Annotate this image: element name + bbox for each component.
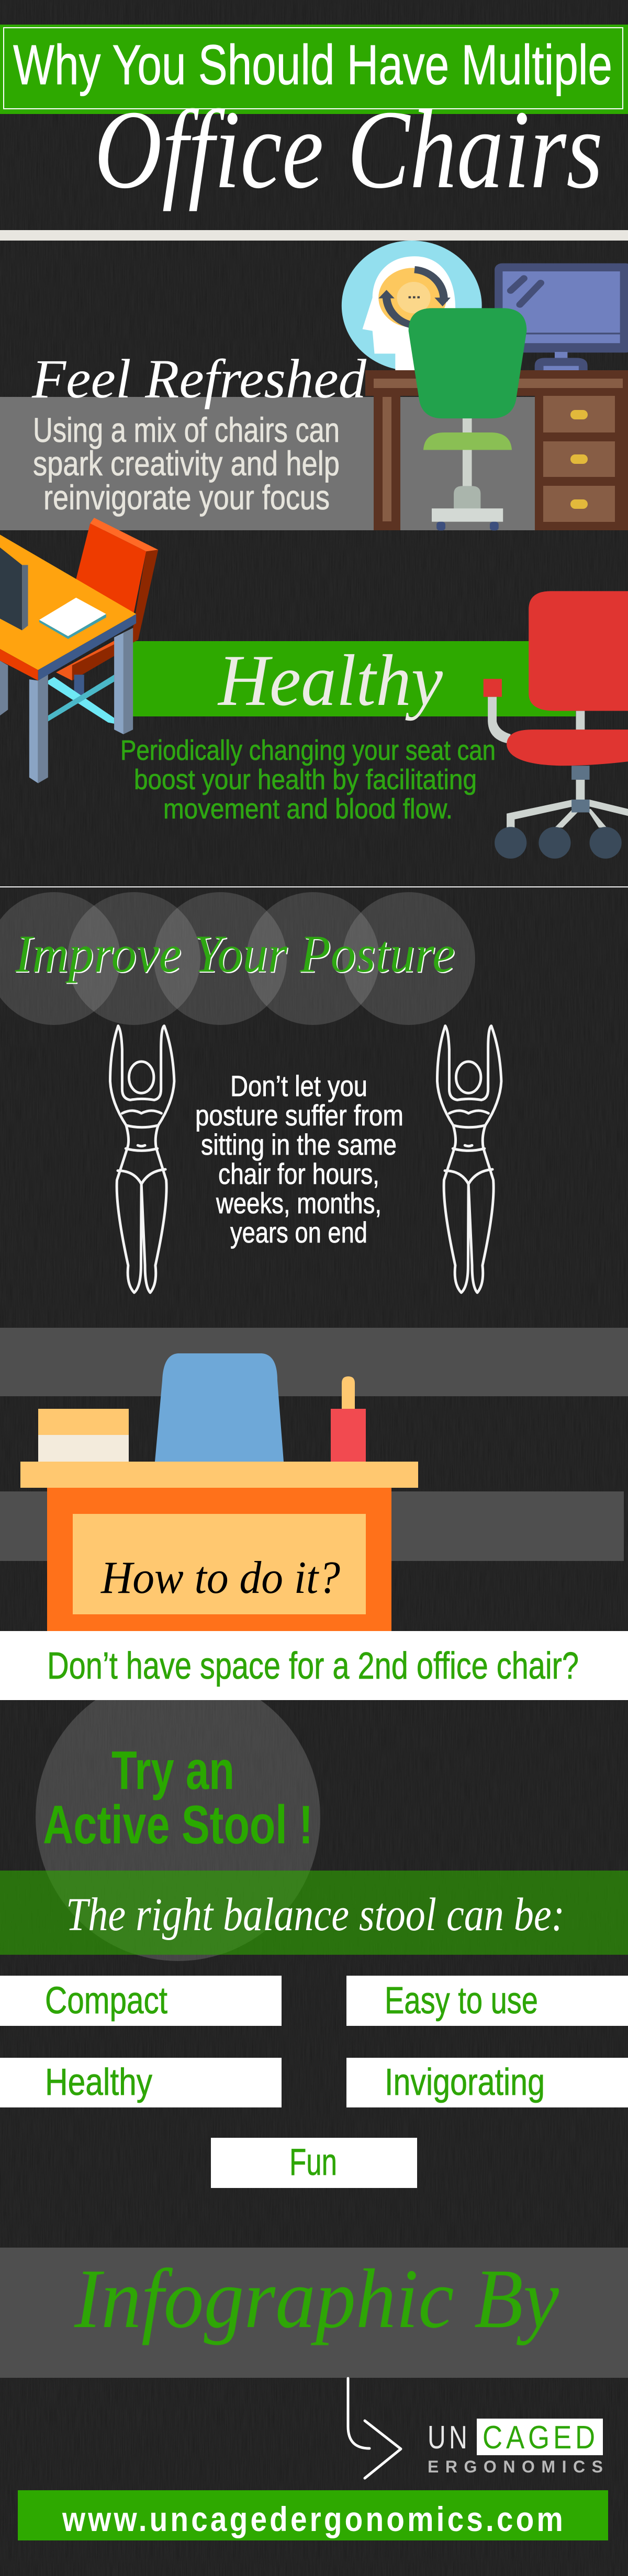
text: healthy body: Periodically changing your seat can: [120, 735, 496, 766]
panel: how to do it: [0, 1328, 628, 1631]
panel: feel refreshed: [0, 241, 628, 530]
icon: left body outline: [110, 1026, 174, 1293]
icon: head with rotating thought: [342, 241, 482, 371]
website bar: [18, 2490, 608, 2540]
box: healthy: Healthy: [45, 2061, 152, 2103]
green translucent band: [0, 1871, 628, 1955]
logo: uncaged ergonomics: ERGONOMICS: [428, 2457, 603, 2476]
heading: try an active stool: Try an: [111, 1740, 234, 1801]
green heading band: [131, 641, 576, 716]
text: posture body: chair for hours,: [218, 1157, 379, 1190]
icon: red office chair: [484, 591, 628, 859]
grey text band: [0, 397, 628, 530]
heading: healthy: Healthy: [217, 640, 443, 721]
heading shadow: improve your posture: Improve Your Posture: [16, 926, 456, 985]
box: fun: [211, 2138, 417, 2188]
text: healthy body: [120, 735, 496, 825]
text: healthy body: movement and blood flow.: [163, 793, 453, 825]
text: posture body: posture suffer from: [195, 1099, 403, 1132]
title banner inner border: [4, 28, 623, 109]
text: posture body: [195, 1069, 403, 1249]
box: easy to use: [346, 1976, 628, 2026]
icon: wooden desk: [365, 370, 628, 530]
grey bands: [0, 1328, 628, 1561]
logo: uncaged ergonomics: UN: [428, 2420, 470, 2456]
text: healthy body: boost your health by facilitating: [134, 764, 477, 795]
heading: feel refreshed: Feel Refreshed: [31, 348, 367, 409]
panel: title: [0, 25, 628, 212]
box: fun: Fun: [289, 2141, 337, 2183]
box: compact: [0, 1976, 282, 2026]
heading: improve your posture: Improve Your Posture: [15, 925, 455, 984]
panel: credits: [0, 2248, 628, 2540]
text: feel refreshed body: spark creativity and help: [33, 444, 340, 483]
icon: monitor: [495, 264, 628, 371]
text: feel refreshed body: [33, 411, 340, 517]
box: invigorating: Invigorating: [385, 2061, 545, 2103]
box: compact: Compact: [45, 1980, 167, 2022]
heading: how to do it: How to do it?: [100, 1553, 340, 1603]
panel: healthy: [0, 518, 628, 859]
box: invigorating: [346, 2058, 628, 2107]
arrow to logo: [348, 2378, 401, 2478]
logo: uncaged ergonomics: [428, 2419, 603, 2476]
icon: orange isometric desk and chair: [0, 518, 158, 783]
logo: uncaged ergonomics: CAGED: [483, 2420, 599, 2456]
icon: green office chair: [409, 308, 526, 530]
icon: right body outline: [437, 1026, 501, 1293]
panel: improve your posture: [0, 892, 501, 1293]
heading: infographic by: Infographic By: [74, 2252, 559, 2346]
title banner: [0, 25, 628, 114]
text: posture body: years on end: [230, 1216, 367, 1249]
text: posture body: sitting in the same: [201, 1128, 397, 1161]
box: healthy: [0, 2058, 282, 2107]
text: feel refreshed body: reinvigorate your focus: [43, 478, 330, 517]
text: posture body: weeks, months,: [216, 1187, 382, 1219]
circle behind active stool heading: [36, 1673, 320, 1961]
icon: desk with chair, box and pencil holder: [20, 1353, 418, 1631]
panel: second chair question: [0, 1631, 628, 1700]
grey credit band: [0, 2248, 628, 2378]
text: feel refreshed body: Using a mix of chairs can: [33, 411, 340, 449]
white band: [0, 1631, 628, 1700]
heading: try an active stool: Active Stool !: [43, 1795, 313, 1855]
panel: active stool: [0, 1740, 628, 2188]
heading: try an active stool: [43, 1740, 313, 1855]
box: easy to use: Easy to use: [385, 1980, 538, 2022]
text: posture body: Don’t let you: [230, 1069, 367, 1102]
overlapping circles: [0, 892, 475, 1025]
